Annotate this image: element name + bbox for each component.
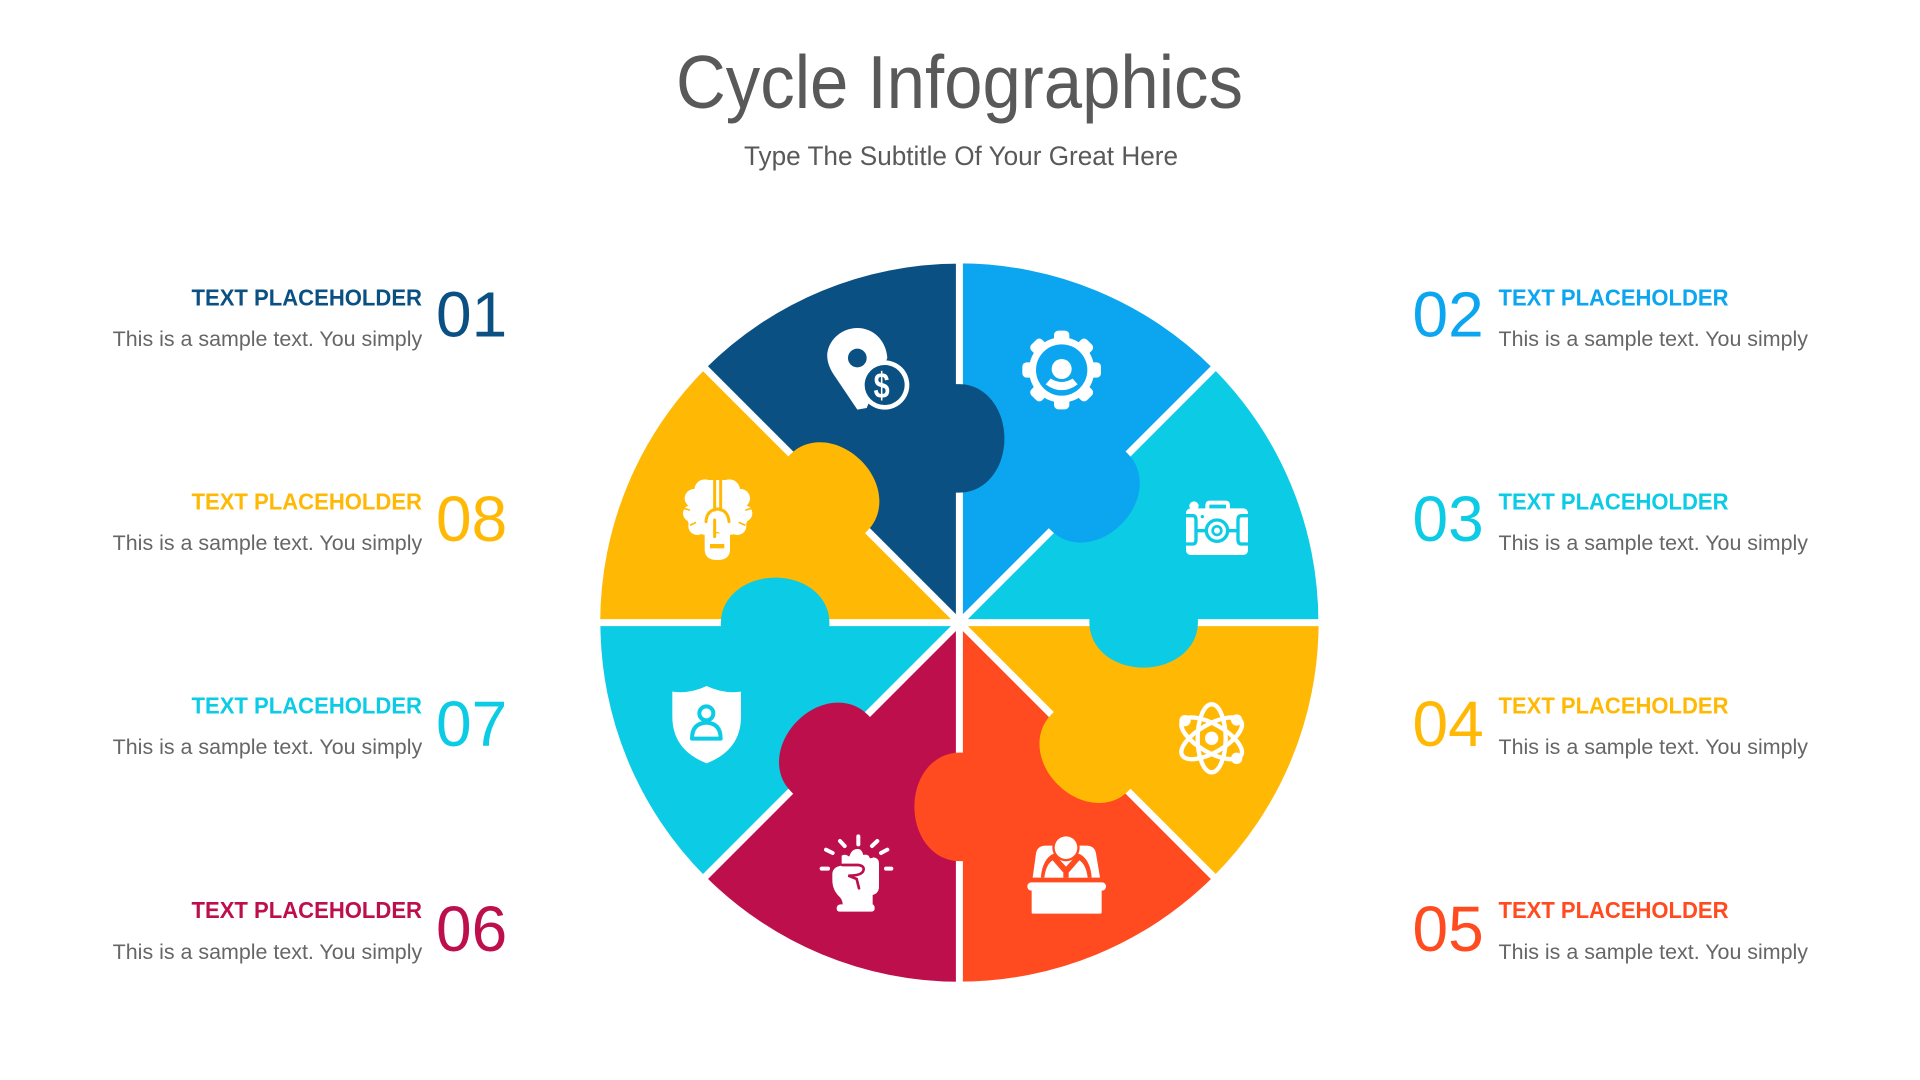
- puzzle tab 06: [759, 683, 870, 794]
- item 04: TEXT PLACEHOLDER: [1498, 692, 1729, 718]
- item 05: 05: [1412, 893, 1484, 965]
- item 06: 06: [436, 893, 507, 965]
- item 01: 01: [436, 279, 507, 351]
- item 06: [113, 893, 507, 965]
- item 04: This is a sample text. You simply: [1498, 736, 1809, 759]
- item 07: [113, 688, 507, 760]
- item 07: This is a sample text. You simply: [113, 736, 423, 759]
- puzzle tab 02: [1048, 451, 1160, 562]
- piece 01 navy: [705, 264, 959, 623]
- item 01: This is a sample text. You simply: [113, 328, 423, 351]
- puzzle tab 08: [788, 422, 899, 534]
- item 02: TEXT PLACEHOLDER: [1498, 284, 1729, 310]
- item 02: [1412, 279, 1809, 351]
- item 05: TEXT PLACEHOLDER: [1498, 897, 1729, 923]
- item 03: This is a sample text. You simply: [1498, 532, 1809, 555]
- piece 06 magenta: [706, 623, 1139, 1056]
- piece 03 cyan: [959, 369, 1318, 623]
- item 06: This is a sample text. You simply: [113, 941, 423, 964]
- icon: shield with person: [672, 686, 741, 763]
- icon: speaker at podium: [1027, 834, 1106, 914]
- item 03: TEXT PLACEHOLDER: [1498, 488, 1729, 514]
- piece 05 orange: [959, 623, 1213, 982]
- puzzle tab 04: [1020, 712, 1131, 823]
- item 04: [1412, 688, 1809, 760]
- piece 08 yellow: [526, 369, 959, 802]
- puzzle wheel: [526, 189, 1393, 1056]
- item 01: [113, 279, 507, 351]
- item 05: This is a sample text. You simply: [1498, 941, 1809, 964]
- icon: brain light bulb: [683, 479, 752, 560]
- piece 02 blue: [780, 189, 1213, 623]
- puzzle tab 03: [1089, 619, 1198, 668]
- item 06: TEXT PLACEHOLDER: [192, 897, 422, 923]
- item 03: 03: [1412, 483, 1484, 555]
- puzzle tab 05: [914, 753, 963, 861]
- title: Cycle Infographics: [676, 40, 1243, 124]
- item 01: TEXT PLACEHOLDER: [192, 284, 422, 310]
- item 02: This is a sample text. You simply: [1498, 328, 1809, 351]
- item 05: [1412, 893, 1809, 965]
- piece 07 cyan: [600, 623, 959, 877]
- icon: location pin with dollar: [827, 328, 909, 410]
- icon: location pin with dollar: $: [874, 365, 890, 406]
- icon: gear with person: [1022, 331, 1101, 409]
- piece 04 yellow: [959, 443, 1393, 876]
- icon: atom: [1175, 704, 1248, 772]
- item 04: 04: [1412, 688, 1484, 760]
- icon: camera: [1185, 501, 1250, 555]
- item 08: [113, 483, 507, 555]
- item 07: TEXT PLACEHOLDER: [192, 692, 422, 718]
- subtitle: Type The Subtitle Of Your Great Here: [744, 141, 1178, 171]
- puzzle tab 07: [721, 578, 829, 627]
- item 08: TEXT PLACEHOLDER: [192, 488, 422, 514]
- item 08: This is a sample text. You simply: [113, 532, 423, 555]
- puzzle tab 01: [955, 384, 1004, 493]
- icon: raised fist: [822, 836, 891, 912]
- item 08: 08: [436, 483, 507, 555]
- item 07: 07: [436, 688, 507, 760]
- item 03: [1412, 483, 1809, 555]
- item 02: 02: [1412, 279, 1484, 351]
